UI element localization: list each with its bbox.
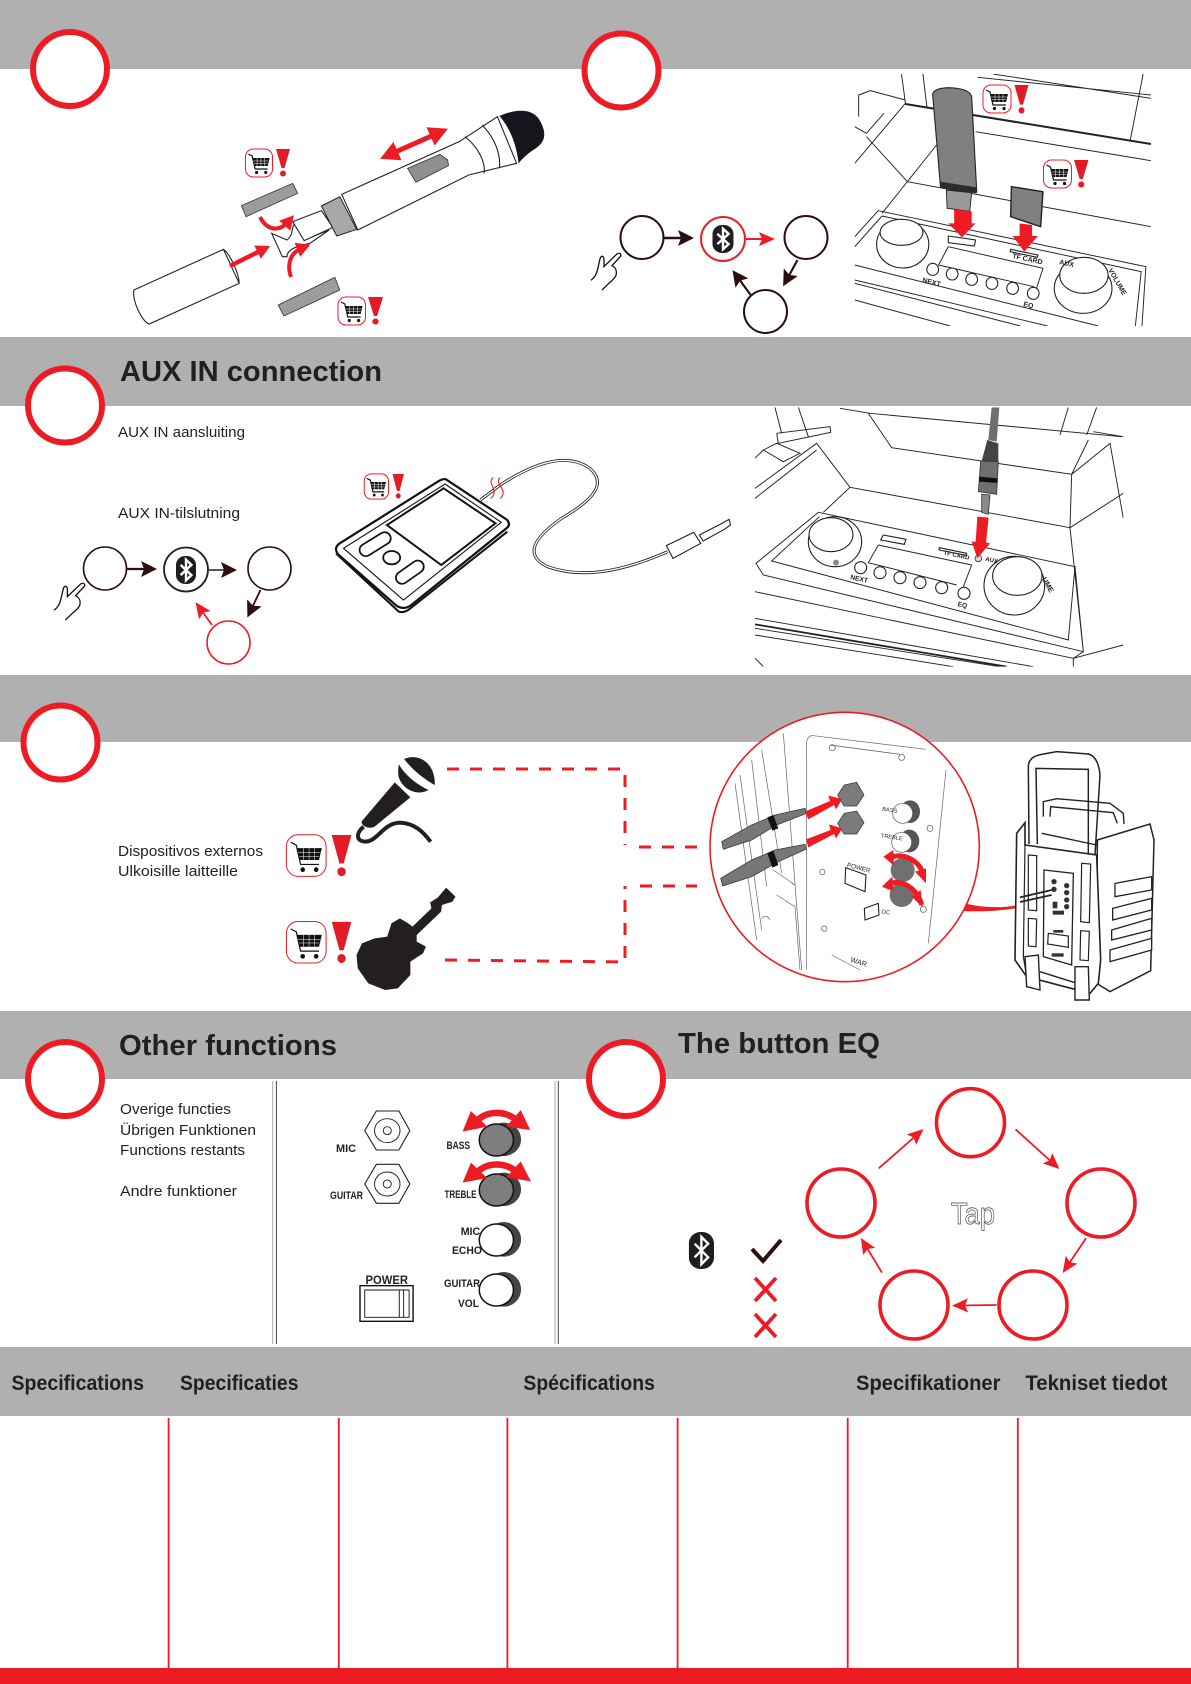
frame inner line bbox=[1023, 845, 1027, 977]
step circle bbox=[784, 216, 828, 259]
illustration: trolley speaker rear bbox=[963, 752, 1154, 1000]
red arrow to USB slot bbox=[948, 209, 976, 237]
player body shadow bbox=[336, 532, 507, 612]
text: Danish other functions: Andre funktioner bbox=[120, 1183, 237, 1200]
cable bbox=[480, 460, 668, 573]
power switch rocker bbox=[365, 1290, 409, 1317]
jack MIC bbox=[838, 782, 864, 806]
title: the button EQ: The button EQ bbox=[678, 1028, 880, 1060]
arrow: insert top battery bbox=[260, 217, 288, 229]
icon: warning guitar bbox=[332, 922, 351, 963]
panel labels bbox=[922, 253, 1127, 311]
panel line work bbox=[735, 733, 946, 970]
GUITAR jack bbox=[365, 1164, 410, 1203]
USB slot bbox=[881, 535, 906, 544]
BASS knob ridges bbox=[486, 1123, 521, 1156]
USB stick connector bbox=[946, 190, 972, 211]
GUITAR jack ring bbox=[375, 1172, 400, 1196]
plug upper bbox=[722, 808, 807, 849]
microphone body bbox=[342, 117, 517, 230]
illustration: USB and SD card slots bbox=[855, 74, 1151, 326]
number circle 2 bbox=[584, 34, 658, 108]
rotation arrow head bbox=[915, 868, 926, 883]
feet bbox=[1025, 955, 1089, 1000]
left knob bbox=[808, 517, 862, 567]
panel labels: NEXT bbox=[922, 277, 942, 289]
line work bbox=[755, 407, 1123, 667]
icon: warning top battery bbox=[276, 149, 290, 176]
arrow bbox=[209, 569, 231, 571]
panel line work bbox=[855, 74, 1151, 326]
hand bbox=[54, 583, 85, 620]
icon: cross bbox=[755, 1314, 776, 1337]
title: other functions: Other functions bbox=[119, 1030, 337, 1062]
number circle 4 bbox=[24, 706, 98, 780]
USB slot bbox=[948, 236, 976, 246]
screen bbox=[868, 545, 972, 587]
player screen bbox=[387, 488, 496, 565]
number circle 3 bbox=[28, 368, 102, 442]
plug strain relief bbox=[982, 440, 998, 462]
USB stick body bbox=[933, 88, 977, 192]
arrow bbox=[746, 238, 769, 240]
AUX socket bbox=[975, 555, 982, 562]
step circle bbox=[620, 216, 664, 259]
BASS arrow head right bbox=[506, 1110, 530, 1130]
knob TREBLE bbox=[892, 832, 912, 852]
icon: warning bottom battery bbox=[368, 297, 383, 324]
microphone flange bbox=[272, 224, 329, 257]
icon: cart top battery bbox=[245, 149, 273, 177]
labels: WAR bbox=[849, 955, 868, 969]
microphone head bbox=[499, 111, 544, 163]
icon: microphone and guitar silhouettes bbox=[357, 757, 455, 990]
label: Tap: Tap bbox=[951, 1196, 995, 1231]
pill button bbox=[366, 538, 385, 550]
microphone grille base bbox=[398, 764, 428, 792]
arrow bbox=[1016, 1129, 1055, 1165]
control labels: MIC bbox=[461, 1226, 480, 1238]
labels: DC bbox=[881, 909, 890, 916]
dashed connector: microphone bbox=[447, 769, 697, 847]
knob BASS bbox=[893, 803, 913, 823]
EQ circle top bbox=[936, 1089, 1004, 1157]
panel labels: EQ bbox=[957, 601, 968, 610]
panel labels: AUX bbox=[1059, 259, 1075, 269]
arrow: slide direction bbox=[392, 134, 436, 154]
step circle red bbox=[207, 621, 250, 664]
knob GUITAR VOL bbox=[890, 883, 914, 907]
SD slot bbox=[1010, 249, 1038, 257]
jack GUITAR bbox=[838, 811, 864, 834]
icon: cart player bbox=[364, 474, 389, 499]
side ribs bbox=[1110, 877, 1152, 962]
labels: TREBLE bbox=[880, 833, 903, 842]
arrow bbox=[126, 568, 151, 570]
plugs into panel bbox=[1020, 890, 1052, 902]
top battery bbox=[241, 183, 298, 217]
TREBLE arrow head left bbox=[463, 1163, 487, 1183]
cable core bbox=[480, 460, 668, 573]
illustration: magnified rear panel bbox=[710, 712, 979, 982]
footer bar bbox=[0, 1668, 1191, 1684]
arrow bbox=[664, 237, 688, 239]
icon: warning player bbox=[392, 474, 404, 499]
arrow bbox=[958, 1304, 997, 1306]
guitar bbox=[357, 888, 455, 990]
rotation arrow bbox=[887, 882, 922, 905]
number circle 6 bbox=[589, 1042, 663, 1116]
battery cover bbox=[134, 249, 239, 324]
left knob top bbox=[880, 219, 923, 245]
right knob bbox=[984, 556, 1045, 615]
panel labels: EQ bbox=[1023, 301, 1035, 311]
arrow bbox=[786, 260, 798, 281]
control labels: BASS bbox=[446, 1140, 470, 1152]
icon: cart SD bbox=[1044, 160, 1072, 188]
panel labels: TF CARD bbox=[943, 550, 971, 562]
arrow bbox=[250, 590, 260, 612]
controls diagram bbox=[360, 1110, 531, 1321]
dashed connector: guitar bbox=[445, 886, 697, 962]
number circle 1 bbox=[33, 32, 107, 106]
heading: Spécifications: Spécifications bbox=[523, 1372, 655, 1395]
plug tip bbox=[982, 494, 990, 514]
arrow: insert bottom battery bbox=[289, 248, 302, 277]
red arrow bbox=[972, 517, 990, 558]
panel labels: UME bbox=[1040, 575, 1056, 594]
step circle bbox=[248, 547, 291, 590]
control labels: POWER bbox=[366, 1273, 408, 1287]
panel labels: NEXT bbox=[850, 574, 868, 585]
BASS knob bbox=[479, 1124, 513, 1156]
TREBLE rotation arrow bbox=[475, 1165, 519, 1175]
text: Danish AUX: AUX IN-tilslutning bbox=[118, 505, 240, 522]
text: Dutch other functions: Overige functies bbox=[120, 1101, 231, 1118]
buttons bbox=[855, 562, 970, 599]
cycle diagram: section 2 bbox=[591, 216, 828, 333]
panel labels: VOLUME bbox=[1106, 268, 1127, 297]
icon: cart USB bbox=[983, 85, 1011, 113]
EQ circle bottom left bbox=[880, 1271, 948, 1339]
cycle diagram: AUX IN bbox=[54, 547, 291, 664]
mounting holes bbox=[820, 745, 933, 931]
rear frame bbox=[1015, 823, 1101, 993]
EQ circle bottom right bbox=[999, 1271, 1067, 1339]
plug tip bbox=[699, 519, 731, 541]
arrow red bbox=[199, 607, 212, 625]
step circle bbox=[84, 547, 126, 590]
MIC ECHO knob bbox=[479, 1224, 513, 1256]
pill button inner bbox=[366, 538, 385, 550]
control labels: VOL bbox=[458, 1298, 479, 1310]
pill button inner bbox=[402, 567, 418, 578]
panel labels bbox=[850, 550, 1056, 610]
control labels: TREBLE bbox=[444, 1189, 476, 1201]
BASS arrow head left bbox=[463, 1111, 487, 1132]
top handle bbox=[1042, 799, 1124, 845]
screen bbox=[939, 247, 1043, 290]
plug upper band bbox=[767, 815, 778, 831]
plug body bbox=[666, 532, 701, 558]
control labels: MIC bbox=[336, 1143, 356, 1155]
hand bbox=[591, 253, 621, 290]
control labels bbox=[330, 1140, 482, 1310]
MIC jack bbox=[365, 1111, 410, 1150]
heading: Specificaties: Specificaties bbox=[180, 1372, 298, 1395]
icon: cart guitar bbox=[286, 921, 326, 963]
microphone neck bbox=[293, 211, 333, 241]
arrow bbox=[1066, 1238, 1086, 1268]
break mark bbox=[491, 478, 503, 498]
TREBLE arrow head right bbox=[506, 1161, 531, 1181]
header band: section 1 and 2 bbox=[0, 0, 1191, 69]
panel labels: AUX bbox=[985, 557, 998, 565]
control labels: ECHO bbox=[452, 1245, 482, 1257]
bottom battery bbox=[278, 277, 340, 316]
pill button bbox=[402, 567, 418, 578]
microphone switch bbox=[408, 154, 448, 182]
plug lower bbox=[721, 844, 806, 886]
icon: check mark bbox=[752, 1240, 781, 1261]
red arrow lower bbox=[806, 824, 842, 847]
header band: section 4 bbox=[0, 675, 1191, 742]
player inner outline bbox=[344, 484, 501, 600]
red arrow upper bbox=[805, 796, 842, 819]
SD card bbox=[1011, 187, 1043, 227]
rotation arrow head bbox=[912, 890, 923, 907]
USB stick band bbox=[940, 182, 977, 193]
icon: warning USB bbox=[1014, 85, 1028, 113]
panel labels: TF CARD bbox=[1012, 253, 1043, 266]
threaded ring bbox=[321, 197, 357, 236]
connector wedge to speaker bbox=[963, 903, 1027, 911]
knob BASS ridge bbox=[900, 800, 920, 823]
icon: cart mic bbox=[286, 835, 326, 876]
arrow bbox=[879, 1133, 919, 1168]
knob TREBLE ridge bbox=[899, 830, 919, 852]
DC socket bbox=[864, 903, 879, 920]
text: external devices: Dispositivos externos bbox=[118, 843, 263, 860]
illustration: wireless microphone with batteries bbox=[134, 111, 544, 324]
labels: POWER bbox=[846, 862, 871, 875]
left knob top bbox=[809, 518, 853, 552]
icon: bluetooth EQ bbox=[689, 1232, 714, 1269]
power switch bbox=[845, 868, 866, 892]
right knob bbox=[1054, 273, 1112, 314]
text: Dutch AUX: AUX IN aansluiting bbox=[118, 424, 245, 441]
side cabinet bbox=[1097, 824, 1154, 992]
EQ circle left bbox=[807, 1169, 875, 1237]
heading: Tekniset tiedot: Tekniset tiedot bbox=[1025, 1372, 1167, 1395]
text: German other functions: Übrigen Funktionen bbox=[120, 1121, 256, 1139]
text: French other functions: Functions restants bbox=[120, 1142, 245, 1159]
thick ledge line bbox=[905, 104, 1151, 144]
grille slots bbox=[1028, 855, 1091, 961]
player body bbox=[336, 479, 509, 608]
BASS rotation arrow bbox=[475, 1113, 519, 1124]
buttons bbox=[927, 263, 1039, 299]
icon: cart bottom battery bbox=[338, 297, 366, 325]
arrow bbox=[864, 1243, 882, 1273]
right knob top bbox=[1060, 257, 1108, 293]
arrow: cover on bbox=[230, 250, 262, 266]
EQ cycle diagram bbox=[807, 1089, 1135, 1339]
plug cable bbox=[988, 407, 999, 442]
left knob bbox=[876, 228, 930, 268]
power switch bbox=[360, 1286, 413, 1321]
bluetooth icon bbox=[176, 556, 196, 584]
rotation arrow head bbox=[882, 877, 893, 891]
header band: AUX IN connection bbox=[0, 337, 1191, 406]
number circle 5 bbox=[28, 1042, 102, 1116]
TREBLE knob ridges bbox=[486, 1173, 521, 1206]
microphone cable bbox=[358, 823, 431, 842]
knob MIC ECHO bbox=[891, 858, 915, 882]
illustration: AUX plug into panel bbox=[755, 407, 1123, 667]
round button bbox=[383, 551, 400, 564]
MIC ECHO knob ridges bbox=[486, 1222, 521, 1257]
GUITAR VOL knob bbox=[479, 1274, 513, 1306]
icon: cross bbox=[755, 1278, 776, 1301]
red arrow to SD slot bbox=[1013, 223, 1038, 252]
plug lower band bbox=[767, 851, 778, 868]
rotation arrow bbox=[888, 856, 924, 877]
labels: BASS bbox=[882, 807, 898, 815]
header band: other functions and EQ bbox=[0, 1011, 1191, 1079]
step circle bbox=[744, 290, 787, 333]
thick stripe bbox=[755, 624, 1007, 667]
arrow bbox=[736, 275, 751, 295]
control labels: GUITAR bbox=[330, 1190, 363, 1202]
GUITAR VOL knob ridges bbox=[486, 1272, 521, 1307]
illustration: audio player with cable bbox=[336, 460, 731, 612]
panel controls bbox=[1051, 879, 1069, 957]
control labels: GUITAR bbox=[444, 1278, 480, 1290]
text: Finnish external devices: Ulkoisille laitteille bbox=[118, 863, 238, 880]
rotation arrow head bbox=[883, 850, 894, 866]
EQ circle right bbox=[1067, 1169, 1135, 1237]
MIC jack ring bbox=[375, 1119, 400, 1143]
SD slot bbox=[939, 548, 967, 555]
right knob top bbox=[993, 557, 1042, 595]
indicator bbox=[833, 560, 839, 566]
rear panel bbox=[1043, 870, 1073, 965]
header band: specifications bbox=[0, 1347, 1191, 1416]
MIC jack centre bbox=[383, 1127, 391, 1135]
microphone head bbox=[404, 757, 435, 785]
bluetooth circle bbox=[701, 217, 745, 261]
bluetooth circle bbox=[164, 548, 208, 592]
magnifier circle bbox=[710, 712, 979, 982]
icon: warning SD bbox=[1074, 160, 1088, 188]
labels bbox=[846, 807, 903, 969]
TREBLE knob bbox=[479, 1174, 513, 1206]
trolley handle bbox=[1028, 752, 1100, 855]
icon: warning mic bbox=[332, 835, 351, 876]
plug barrel bbox=[978, 461, 998, 494]
plug band bbox=[979, 477, 998, 483]
title: AUX IN connection: AUX IN connection bbox=[120, 356, 382, 388]
GUITAR jack centre bbox=[383, 1180, 391, 1188]
bluetooth icon bbox=[712, 225, 734, 253]
heading: Specifikationer: Specifikationer bbox=[856, 1372, 1000, 1395]
heading: Specifications EN: Specifications bbox=[12, 1372, 144, 1395]
microphone handle bbox=[362, 782, 410, 828]
